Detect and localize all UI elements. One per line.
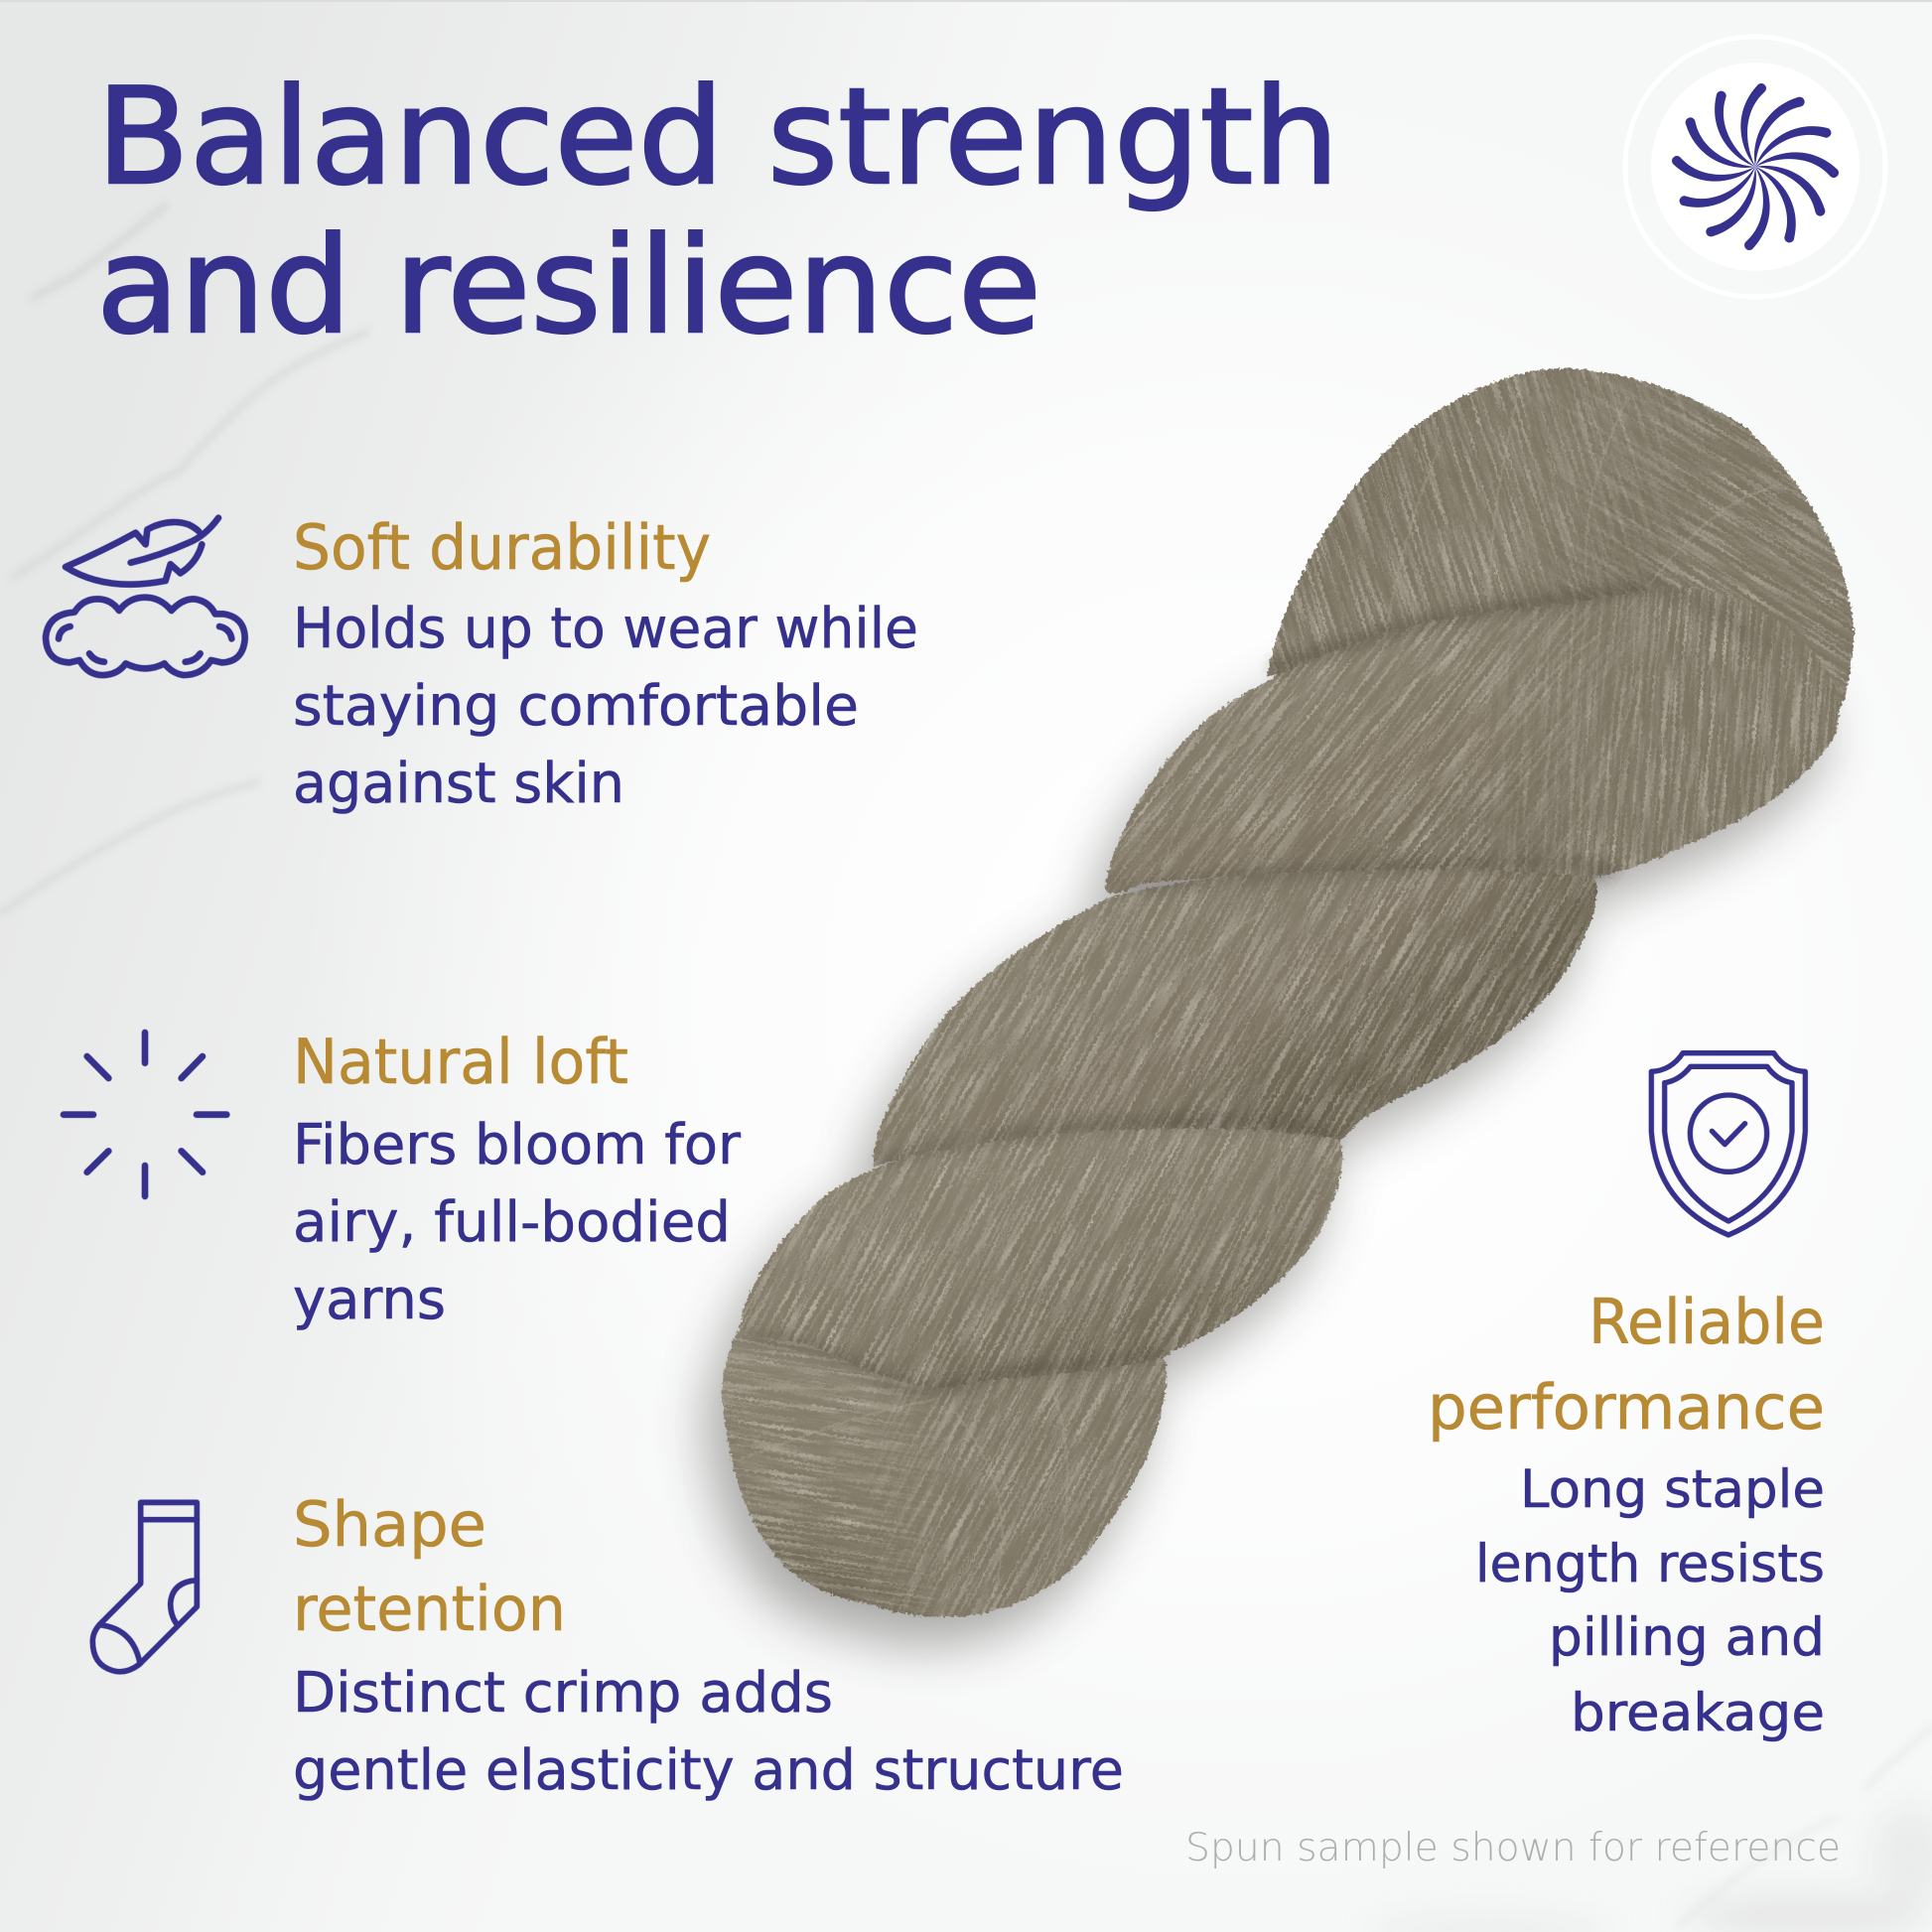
heading: performance (1428, 1371, 1825, 1444)
icon: sock (92, 1502, 197, 1672)
body text: Fibers bloom for (293, 1113, 742, 1177)
body text: breakage (1571, 1683, 1825, 1743)
body text (293, 597, 918, 816)
body text: Distinct crimp adds (293, 1661, 833, 1725)
panel: shape retention (92, 1488, 1124, 1803)
heading: Natural loft (293, 1026, 628, 1098)
heading (1428, 1286, 1825, 1444)
body text: yarns (293, 1268, 446, 1332)
body text: against skin (293, 752, 624, 816)
logo badge (1625, 37, 1885, 297)
body text (1475, 1459, 1825, 1743)
heading: Shape (293, 1488, 486, 1561)
footnote: Spun sample shown for reference (1185, 1826, 1841, 1870)
heading: retention (293, 1573, 566, 1645)
body text (293, 1113, 742, 1332)
icon: spinning fibre swirl (1672, 83, 1839, 250)
body text: Holds up to wear while (293, 597, 918, 661)
icon: feather over cloud (46, 518, 245, 675)
heading: Reliable (1588, 1286, 1825, 1358)
strand highlights (730, 392, 1777, 1598)
panel: soft durability (46, 511, 918, 816)
icon: loft burst (64, 1033, 226, 1196)
icon: shield with check (1651, 1053, 1805, 1235)
title (96, 60, 1339, 363)
yarn skein photo illustration (677, 367, 1856, 1675)
heading: Soft durability (293, 511, 711, 584)
title: and resilience (96, 208, 1041, 363)
body text: Long staple (1520, 1459, 1825, 1520)
body text: pilling and (1549, 1607, 1825, 1668)
twist shadows (755, 588, 1757, 1389)
body text: staying comfortable (293, 674, 859, 739)
panel: reliable performance (1428, 1053, 1825, 1743)
panel: natural loft (64, 1026, 742, 1332)
body text: length resists (1475, 1534, 1825, 1594)
body text: airy, full-bodied (293, 1190, 731, 1255)
heading (293, 1488, 566, 1645)
title: Balanced strength (96, 60, 1339, 214)
body text (293, 1661, 1124, 1803)
body text: gentle elasticity and structure (293, 1738, 1124, 1803)
